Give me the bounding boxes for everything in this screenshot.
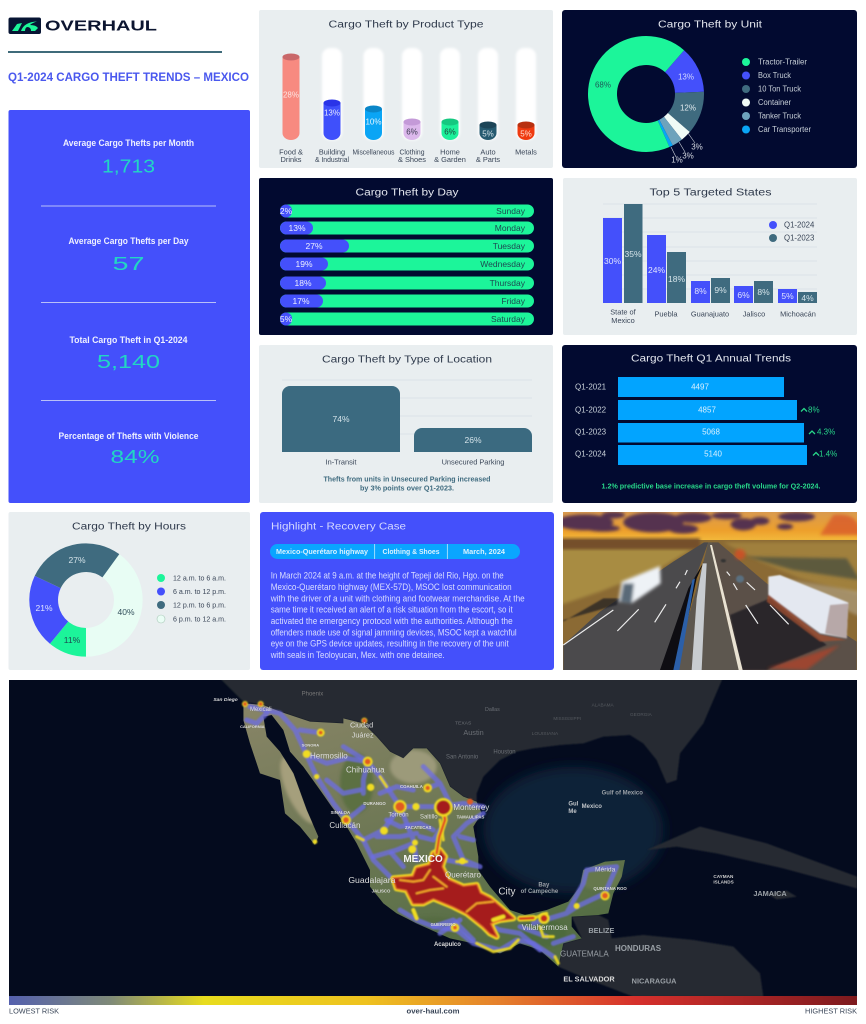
donut value labels: 13% (678, 72, 694, 82)
map: cargo theft risk heat map of Mexico: Gulf of Mexico (602, 791, 643, 797)
panel: cargo theft by hours (8, 512, 250, 670)
row: Friday (280, 294, 534, 308)
stat: total thefts: 5,140 (97, 352, 160, 372)
panel: cargo theft by type of location (259, 345, 553, 503)
row: Friday: 17% (292, 296, 310, 306)
low risk road network (247, 707, 617, 957)
donut value labels: 3% (682, 152, 694, 160)
note: by 3% points over Q1-2023. (360, 484, 454, 492)
bar: in-transit: In-Transit (326, 458, 356, 466)
row: Q1-2022 (575, 400, 820, 420)
risk gradient bar (9, 996, 857, 1005)
map place labels: Mérida (595, 866, 616, 873)
header rule (8, 51, 222, 53)
gulf of mexico water (483, 767, 663, 893)
bar: building and industrial: Building (319, 148, 345, 156)
panel: cargo theft by product type (259, 10, 553, 168)
group: State of Mexico: 30% (604, 256, 621, 266)
logo (8, 18, 157, 34)
map: cargo theft risk heat map of Mexico: Me (568, 809, 577, 815)
logo: OVERHAUL (45, 18, 157, 34)
group: State of Mexico: 35% (624, 249, 642, 259)
map place labels (213, 691, 627, 948)
map: cargo theft risk heat map of Mexico: San Antonio (446, 754, 479, 760)
case narrative: same time it received an alert of a risk situation from the escort, so it (271, 605, 513, 615)
legend: 6 a.m. to 12 p.m. (173, 587, 226, 596)
map: cargo theft risk heat map of Mexico: GUATEMALA (560, 949, 609, 958)
cylinder tracks (322, 48, 536, 140)
group: Guanajuato (691, 278, 730, 318)
group: Puebla: 18% (668, 274, 685, 284)
row: Q1-2023 (575, 423, 835, 442)
case narrative: In March 2024 at 9 a.m. at the height of Tepeji del Rio, Hgo. on the (271, 571, 504, 581)
row: Thursday (280, 276, 534, 290)
bar: unsecured parking: Unsecured Parking (442, 458, 504, 466)
bar: miscellaneous: 10% (365, 118, 382, 126)
group: Guanajuato: 9% (714, 285, 727, 295)
bar: auto and parts (476, 122, 500, 164)
group: Jalisco: Jalisco (743, 310, 765, 318)
row: Q1-2024: Q1-2024 (575, 450, 607, 458)
map place labels: SONORA (302, 742, 319, 747)
map place labels: Chihuahua (346, 765, 385, 774)
group: Guanajuato: Guanajuato (691, 310, 729, 318)
donut chart (27, 541, 145, 659)
case narrative: with seals in Teoloyucan, Mex. with one detainee. (270, 650, 445, 660)
photo: trucks on a highway at sunset (557, 512, 860, 673)
group: Jalisco: 6% (737, 290, 750, 300)
map place labels: Phoenix (302, 691, 323, 697)
group: Puebla: Puebla (654, 310, 678, 318)
medium risk corridors (357, 777, 558, 963)
group: State of Mexico: State of (610, 308, 637, 316)
map: cargo theft risk heat map of Mexico: LOUISIANA (532, 731, 559, 737)
legend: Container (758, 98, 791, 107)
bar: home and garden: 6% (444, 128, 456, 136)
info pill: Clothing & Shoes (382, 547, 440, 556)
map place labels: CALIFORNIA (240, 724, 265, 729)
bar: auto and parts: & Parts (476, 155, 500, 164)
row: Sunday (280, 204, 534, 218)
map place labels: Querétaro (445, 870, 482, 879)
panel: cargo theft Q1 annual trends (562, 345, 857, 503)
note (324, 474, 491, 492)
bar: unsecured parking (414, 428, 532, 466)
highest risk label: HIGHEST RISK (805, 1006, 857, 1016)
bar: clothing and shoes: & Shoes (398, 155, 426, 164)
map: cargo theft risk heat map of Mexico: ALABAMA (592, 702, 615, 707)
group: Michoacan: 5% (781, 291, 794, 301)
map place labels: Villahermosa (522, 923, 568, 932)
row: Wednesday: Wednesday (480, 259, 526, 269)
map place labels: JALISCO (372, 888, 391, 893)
donut value labels (35, 555, 135, 645)
group: Jalisco: 8% (757, 287, 770, 297)
stat: total thefts (70, 335, 188, 372)
map place labels: Saltillo (420, 815, 438, 821)
case narrative (270, 571, 525, 660)
legend: Car Transporter (758, 125, 811, 134)
row: Q1-2022: 8% (808, 406, 820, 414)
bar: clothing and shoes (398, 118, 426, 164)
map: cargo theft risk heat map of Mexico: Gul (568, 801, 579, 807)
panel: top 5 targeted states (563, 178, 857, 335)
map: cargo theft risk heat map of Mexico: GEORGIA (630, 712, 653, 717)
map: cargo theft risk heat map of Mexico: BELIZE (588, 926, 614, 935)
bar: food and drinks: 28% (283, 90, 299, 100)
map: cargo theft risk heat map of Mexico: Austin (463, 728, 484, 737)
row: Q1-2021: 4497 (691, 382, 709, 392)
hot spots (242, 701, 610, 932)
bar: building and industrial: & Industrial (315, 155, 349, 164)
bar: metals: 5% (520, 130, 532, 138)
row: Q1-2022: 4857 (698, 406, 716, 414)
bar: clothing and shoes: Clothing (400, 148, 424, 156)
row: Sunday: 2% (280, 206, 293, 216)
lowest risk label: LOWEST RISK (9, 1006, 59, 1016)
stat: thefts per day (68, 236, 189, 274)
map: cargo theft risk heat map of Mexico: TEXAS (455, 720, 472, 726)
group: Guanajuato: 8% (694, 286, 707, 296)
row: Q1-2023: 4.3% (817, 428, 835, 436)
mexico landmass (233, 697, 633, 973)
website: over-haul.com (406, 1006, 460, 1016)
map place labels: COAHUILA (400, 784, 424, 789)
map place labels: Monterrey (453, 803, 489, 812)
row: Q1-2021: Q1-2021 (575, 382, 607, 392)
heading: Cargo Theft Q1 Annual Trends (631, 354, 791, 364)
legend: Q1-2024 (784, 220, 815, 230)
stat: thefts per month (63, 138, 194, 176)
row: Monday: Monday (495, 223, 526, 233)
heading: Top 5 Targeted States (650, 188, 772, 198)
map: cargo theft risk heat map of Mexico: CAYMAN (713, 874, 734, 879)
bar: miscellaneous: Miscellaneous (352, 148, 395, 156)
map place labels: GUERRERO (431, 922, 456, 927)
row: Saturday: Saturday (491, 314, 526, 324)
stat: total thefts: Total Cargo Theft in Q1-2024 (70, 335, 188, 345)
legend: 10 Ton Truck (758, 84, 802, 94)
donut chart (585, 33, 707, 155)
group: Michoacan: Michoacán (780, 310, 816, 318)
row: Wednesday: 19% (295, 259, 313, 269)
bar: auto and parts: 5% (482, 130, 494, 138)
bar: food and drinks: Food & (279, 148, 303, 156)
panel: key statistics (8, 110, 250, 503)
row: Q1-2023: 5068 (702, 428, 720, 436)
row: Monday: 13% (288, 223, 306, 233)
map place labels: Mexicali (250, 707, 272, 713)
group: Michoacan (778, 289, 817, 318)
legend: Box Truck (758, 71, 792, 80)
bar: auto and parts: Auto (480, 148, 496, 156)
risk scale legend (9, 996, 857, 1016)
stat: thefts per day: 57 (112, 254, 144, 274)
case narrative: eye on the GPS device updates, resulting in the recovery of the unit (271, 639, 509, 649)
high risk central corridor (393, 798, 550, 937)
donut value labels: 27% (68, 555, 86, 565)
group: Michoacan: 4% (801, 293, 814, 303)
bar: home and garden: Home (440, 148, 460, 156)
legend: Tanker Truck (758, 112, 802, 120)
map: cargo theft risk heat map of Mexico: Dallas (485, 707, 500, 713)
group: State of Mexico (603, 204, 642, 325)
row: Saturday (280, 312, 534, 326)
donut value labels: 11% (64, 635, 81, 645)
map place labels: City (498, 886, 516, 897)
heading: Cargo Theft by Product Type (328, 20, 484, 30)
bar: building and industrial: 13% (324, 108, 340, 118)
donut value labels: 68% (595, 80, 611, 90)
heading: Cargo Theft by Type of Location (322, 354, 492, 366)
main title: Q1-2024 CARGO THEFT TRENDS – MEXICO (8, 70, 249, 84)
bar: metals (515, 122, 537, 156)
map place labels: DURANGO (363, 801, 386, 806)
info pill: March, 2024 (463, 547, 506, 556)
map place labels: San Diego (213, 697, 238, 703)
stat: thefts per month: Average Cargo Thefts per Month (63, 138, 194, 148)
bar: miscellaneous (352, 106, 395, 156)
map: cargo theft risk heat map of Mexico: MISSISSIPPI (553, 716, 581, 721)
map place labels: ZACATECAS (405, 825, 431, 830)
case narrative: Mexico-Querétaro highway (MEX-57D), MSOC lost communication (271, 582, 512, 592)
map: cargo theft risk heat map of Mexico (9, 677, 857, 997)
map place labels: Torreón (388, 813, 409, 819)
panel: cargo theft by day (259, 178, 553, 335)
row: Thursday: Thursday (490, 278, 526, 288)
donut value labels: 3% (691, 142, 703, 152)
bar: building and industrial (315, 100, 349, 164)
group: Puebla: 24% (648, 265, 665, 275)
legend: Tractor-Trailer (758, 58, 807, 66)
bar: unsecured parking: 26% (464, 435, 482, 445)
row: Q1-2022: Q1-2022 (575, 406, 607, 414)
row: Q1-2024 (575, 445, 837, 465)
map place labels: Guadalajara (348, 875, 396, 885)
note: Thefts from units in Unsecured Parking increased (324, 474, 491, 484)
legend: 12 a.m. to 6 a.m. (173, 574, 226, 582)
case narrative: with the driver of a unit with clothing and footwear merchandise. At the (270, 593, 525, 603)
map: cargo theft risk heat map of Mexico: ISLANDS (713, 879, 734, 884)
map: cargo theft risk heat map of Mexico: HONDURAS (615, 944, 662, 953)
bar: in-transit (282, 386, 400, 466)
stat: violence share: 84% (110, 447, 160, 467)
legend: 6 p.m. to 12 a.m. (173, 614, 226, 624)
donut value labels (595, 72, 703, 164)
heading: Cargo Theft by Hours (72, 522, 186, 532)
row: Sunday: Sunday (496, 206, 526, 216)
row: Tuesday: Tuesday (493, 241, 526, 251)
map: cargo theft risk heat map of Mexico: Mexico (582, 804, 602, 810)
map place labels: Hermosillo (310, 751, 348, 760)
group: Jalisco (734, 281, 773, 318)
bar: clothing and shoes: 6% (406, 128, 418, 136)
surrounding land (218, 677, 857, 997)
group: State of Mexico: Mexico (611, 316, 635, 325)
row: Saturday: 5% (280, 314, 293, 324)
bar: food and drinks (279, 54, 303, 164)
legend (157, 574, 226, 624)
donut value labels: 1% (671, 156, 683, 164)
stat: violence share (58, 431, 198, 467)
map: cargo theft risk heat map of Mexico: Houston (493, 750, 516, 756)
heading: Cargo Theft by Day (356, 188, 458, 198)
heading: Highlight - Recovery Case (271, 522, 406, 532)
map: cargo theft risk heat map of Mexico: Bay (538, 882, 550, 888)
forecast note: 1.2% predictive base increase in cargo theft volume for Q2-2024. (602, 482, 820, 490)
case narrative: offenders made use of signal jamming devices, MSOC kept a watchful (271, 627, 517, 637)
map: cargo theft risk heat map of Mexico: of Campeche (521, 889, 559, 895)
panel: highlight recovery case (260, 512, 554, 670)
panel: cargo theft by unit (562, 10, 857, 168)
stat: violence share: Percentage of Thefts with Violence (58, 431, 198, 441)
row: Q1-2024: 1.4% (819, 450, 837, 458)
row: Q1-2021 (575, 377, 784, 397)
map: cargo theft risk heat map of Mexico: NICARAGUA (632, 976, 677, 985)
donut value labels: 12% (680, 104, 696, 112)
map: cargo theft risk heat map of Mexico: JAMAICA (753, 889, 787, 898)
legend: 12 p.m. to 6 p.m. (173, 600, 226, 610)
row: Thursday: 18% (294, 278, 312, 288)
bar: in-transit: 74% (332, 414, 350, 424)
info pill: Mexico-Querétaro highway (276, 547, 369, 556)
row: Q1-2024: 5140 (704, 450, 722, 458)
map place labels: TAMAULIPAS (457, 814, 485, 819)
row: Q1-2023: Q1-2023 (575, 428, 607, 436)
map place labels: Juárez (352, 730, 374, 739)
row: Tuesday: 27% (305, 241, 323, 251)
row: Tuesday (280, 240, 534, 252)
stat: thefts per month: 1,713 (102, 156, 155, 176)
map place labels: Culiacán (329, 821, 360, 830)
map place labels: Ciudad (350, 720, 373, 729)
bar: home and garden: & Garden (434, 155, 466, 164)
map place labels: SINALOA (331, 810, 351, 815)
legend: Q1-2023 (784, 234, 814, 242)
bar: metals: Metals (515, 148, 537, 156)
map: cargo theft risk heat map of Mexico: EL SALVADOR (563, 974, 615, 983)
map place labels: QUINTANA ROO (593, 886, 627, 891)
donut value labels: 21% (35, 603, 53, 613)
heading: Cargo Theft by Unit (658, 20, 762, 30)
bar: food and drinks: Drinks (281, 155, 302, 164)
info pill (270, 544, 520, 559)
legend (769, 220, 815, 242)
group: Puebla (647, 235, 686, 318)
map place labels: Acapulco (434, 942, 461, 948)
row: Friday: Friday (501, 296, 526, 306)
bar: home and garden (434, 118, 466, 164)
row: Monday (280, 222, 534, 234)
row: Wednesday (280, 258, 534, 270)
donut value labels: 40% (117, 607, 135, 617)
stat: thefts per day: Average Cargo Thefts per Day (68, 236, 189, 246)
legend (742, 58, 811, 134)
map place labels: MEXICO (403, 854, 443, 865)
case narrative: activated the emergency protocol with the authorities. Although the (271, 616, 513, 626)
